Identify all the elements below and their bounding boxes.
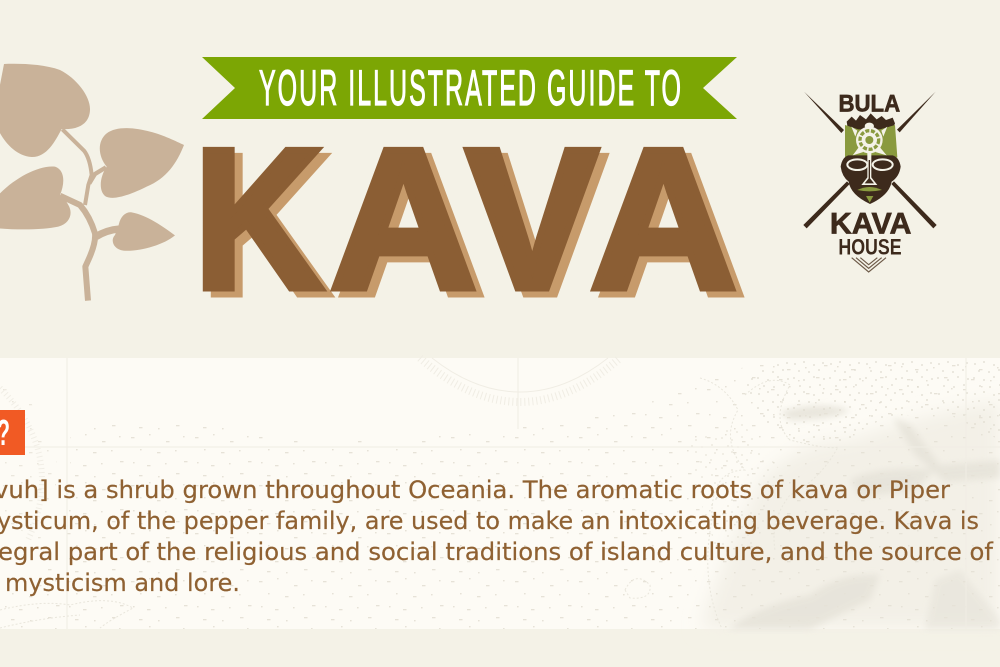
icon: kava plant (0, 64, 184, 301)
logo chevrons (852, 258, 886, 272)
logo word: house: HOUSE (838, 235, 902, 260)
title shadow: V (474, 114, 606, 337)
logo word: kava: KAVA (830, 208, 911, 241)
logo: Bula Kava House (803, 90, 937, 272)
map coastlines (0, 378, 838, 629)
title face: V (466, 108, 598, 331)
title shadow: K (202, 114, 331, 337)
title face: A (590, 107, 737, 331)
title face: K (194, 108, 323, 331)
tiki mask (841, 113, 901, 204)
title shadow: A (598, 113, 745, 337)
text block: kava description (0, 476, 994, 597)
title face (194, 107, 737, 331)
tag: orange question badge (0, 410, 25, 455)
title face: A (330, 107, 477, 331)
logo word: bula: BULA (838, 90, 900, 117)
banner: your illustrated guide to: YOUR ILLUSTRATED GUIDE TO (259, 61, 681, 116)
title: KAVA (194, 107, 745, 337)
crossed spears (803, 92, 937, 228)
text block: kava description: ysticum, of the pepper family, are used to make an intoxicating beverage. Kava is (0, 507, 979, 535)
map broad land tint (700, 400, 1000, 629)
map graticule (0, 358, 1000, 629)
text block: kava description: egral part of the religious and social traditions of island culture, and the source of (0, 538, 994, 566)
map terrain shading (728, 405, 1000, 629)
text block: kava description: vuh] is a shrub grown throughout Oceania. The aromatic roots of kava or Piper (0, 476, 950, 504)
title shadow: A (338, 113, 485, 337)
panel: map background (0, 358, 1000, 629)
map soundings (0, 358, 1000, 629)
title shadow (202, 113, 745, 337)
text block: kava description: mysticism and lore. (5, 569, 240, 597)
